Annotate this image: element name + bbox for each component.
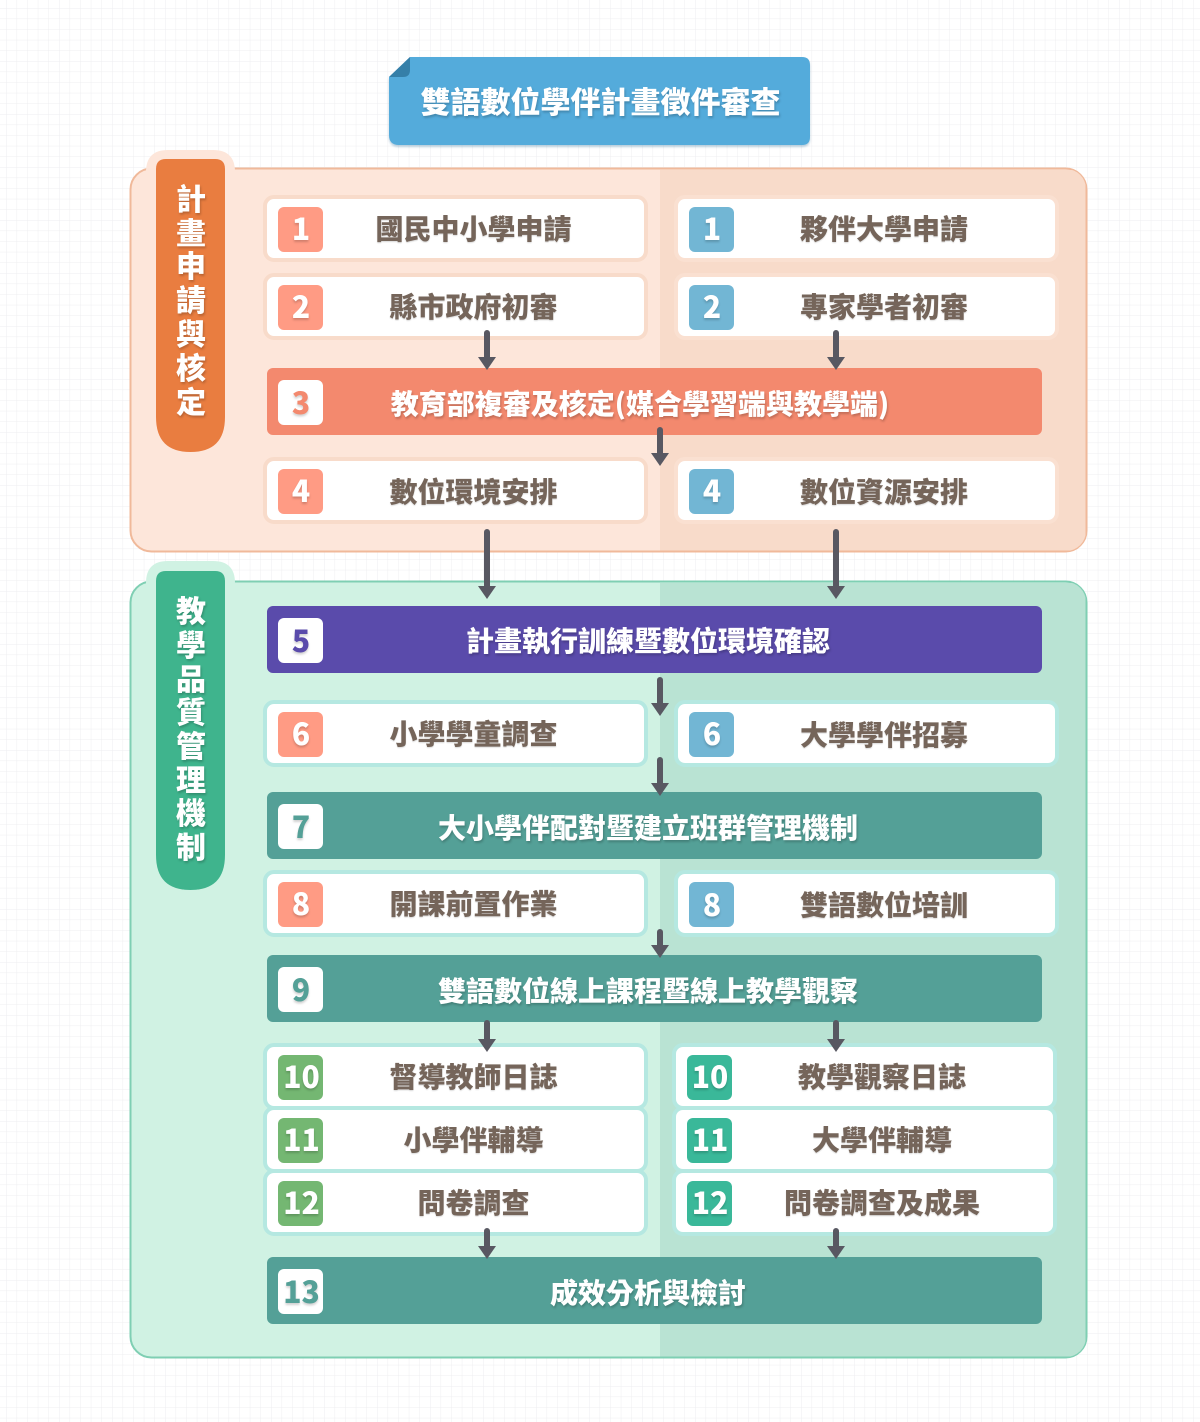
step 10 right: 教學觀察日誌: 教學觀察日誌 bbox=[798, 1056, 966, 1096]
step 12 right: 問卷調查及成果 bbox=[674, 1171, 1055, 1234]
step 4 left: 數位環境安排 bbox=[265, 459, 646, 522]
step 11 right: 大學伴輔導 bbox=[674, 1108, 1055, 1171]
step 2 left: 縣市政府初審: 2 bbox=[292, 283, 310, 327]
side tab: 教學品質管理機制: 管 bbox=[176, 722, 206, 766]
arrow: step 4 right to step 5 bbox=[827, 529, 845, 599]
step 7 bar: 大小學伴配對暨建立班群管理機制 bbox=[267, 792, 1042, 859]
step 6 right: 大學學伴招募: 大學學伴招募 bbox=[800, 714, 968, 754]
step 10 left: 督導教師日誌: 10 bbox=[283, 1053, 320, 1097]
step 6 left: 小學學童調查: 小學學童調查 bbox=[389, 713, 558, 753]
side tab: 教學品質管理機制: 理 bbox=[176, 756, 206, 800]
step 11 left: 小學伴輔導 bbox=[265, 1108, 646, 1171]
side tab: 教學品質管理機制: 教 bbox=[176, 587, 206, 631]
side tab: 教學品質管理機制: 學 bbox=[176, 621, 206, 665]
side tab: 教學品質管理機制: 制 bbox=[176, 823, 206, 867]
step 12 left: 問卷調查: 問卷調查 bbox=[417, 1182, 530, 1222]
step 5 bar: 計畫執行訓練暨數位環境確認 bbox=[267, 606, 1042, 673]
arrow: step 9 to step 10 left bbox=[478, 1020, 496, 1052]
step 7 bar: 大小學伴配對暨建立班群管理機制: 大小學伴配對暨建立班群管理機制 bbox=[438, 807, 858, 847]
step 2 right: 專家學者初審 bbox=[676, 275, 1057, 338]
side tab: 計畫申請與核定: 申 bbox=[176, 242, 206, 286]
step 2 left: 縣市政府初審: 縣市政府初審 bbox=[389, 286, 558, 326]
step 13 bar: 成效分析與檢討: 成效分析與檢討 bbox=[550, 1272, 746, 1312]
arrow: step 6 to step 7 bbox=[651, 757, 669, 796]
arrow: step 12 left to step 13 bbox=[478, 1228, 496, 1259]
arrow: step 2 left to step 3 bbox=[478, 330, 496, 370]
side tab: 計畫申請與核定: 畫 bbox=[176, 209, 206, 253]
step 13 bar: 成效分析與檢討: 13 bbox=[283, 1268, 320, 1312]
step 6 right: 大學學伴招募 bbox=[676, 702, 1057, 765]
arrow: step 8 to step 9 bbox=[651, 929, 669, 958]
side tab: 教學品質管理機制: 品 bbox=[176, 655, 206, 699]
step 1 right: 夥伴大學申請 bbox=[676, 197, 1057, 260]
side tab: 教學品質管理機制 bbox=[146, 561, 235, 890]
step 7 bar: 大小學伴配對暨建立班群管理機制: 7 bbox=[292, 803, 310, 847]
step 11 right: 大學伴輔導: 大學伴輔導 bbox=[812, 1119, 952, 1159]
step 8 right: 雙語數位培訓: 雙語數位培訓 bbox=[800, 884, 968, 924]
side tab: 教學品質管理機制: 質 bbox=[176, 688, 206, 732]
step 9 bar: 雙語數位線上課程暨線上教學觀察 bbox=[267, 955, 1042, 1022]
step 5 bar: 計畫執行訓練暨數位環境確認: 5 bbox=[292, 617, 310, 661]
step 1 left: 國民中小學申請 bbox=[265, 197, 646, 260]
step 8 left: 開課前置作業 bbox=[265, 872, 646, 935]
step 4 right: 數位資源安排 bbox=[676, 459, 1057, 522]
step 10 left: 督導教師日誌: 督導教師日誌 bbox=[389, 1056, 558, 1096]
step 2 right: 專家學者初審: 2 bbox=[703, 283, 721, 327]
side tab: 計畫申請與核定: 請 bbox=[176, 276, 206, 320]
step 6 right: 大學學伴招募: 6 bbox=[703, 710, 721, 754]
side tab: 計畫申請與核定: 與 bbox=[176, 310, 206, 354]
arrow: step 3 to step 4 bbox=[651, 427, 669, 466]
step 12 left: 問卷調查: 12 bbox=[283, 1179, 320, 1223]
step 11 left: 小學伴輔導: 11 bbox=[283, 1116, 320, 1160]
arrow: step 4 left to step 5 bbox=[478, 529, 496, 599]
side tab: 教學品質管理機制: 機 bbox=[176, 789, 206, 833]
step 1 right: 夥伴大學申請: 夥伴大學申請 bbox=[800, 208, 968, 248]
step 1 left: 國民中小學申請: 國民中小學申請 bbox=[375, 208, 572, 248]
arrow: step 12 right to step 13 bbox=[827, 1228, 845, 1259]
step 4 right: 數位資源安排: 4 bbox=[703, 467, 721, 511]
step 10 left: 督導教師日誌 bbox=[265, 1045, 646, 1108]
title banner: 雙語數位學伴計畫徵件審查 bbox=[420, 78, 780, 122]
step 13 bar: 成效分析與檢討 bbox=[267, 1257, 1042, 1324]
step 1 left: 國民中小學申請: 1 bbox=[292, 205, 310, 249]
step 12 left: 問卷調查 bbox=[265, 1171, 646, 1234]
step 10 right: 教學觀察日誌 bbox=[674, 1045, 1055, 1108]
step 3 bar: 教育部複審及核定: 3 bbox=[292, 379, 310, 423]
step 6 left: 小學學童調查 bbox=[265, 702, 646, 765]
step 8 right: 雙語數位培訓 bbox=[676, 872, 1057, 935]
arrow: step 9 to step 10 right bbox=[827, 1020, 845, 1052]
step 11 right: 大學伴輔導: 11 bbox=[692, 1116, 728, 1160]
step 1 right: 夥伴大學申請: 1 bbox=[703, 205, 721, 249]
step 2 left: 縣市政府初審 bbox=[265, 275, 646, 338]
arrow: step 2 right to step 3 bbox=[827, 330, 845, 370]
step 3 bar: 教育部複審及核定 bbox=[267, 368, 1042, 435]
step 4 left: 數位環境安排: 4 bbox=[292, 467, 310, 511]
panel: 計畫申請與核定 bbox=[130, 150, 1086, 552]
step 9 bar: 雙語數位線上課程暨線上教學觀察: 9 bbox=[292, 966, 310, 1010]
title banner bbox=[389, 57, 810, 145]
arrow: step 5 to step 6 bbox=[651, 677, 669, 716]
side tab: 計畫申請與核定 bbox=[146, 150, 235, 452]
step 10 right: 教學觀察日誌: 10 bbox=[692, 1053, 728, 1097]
step 11 left: 小學伴輔導: 小學伴輔導 bbox=[403, 1119, 544, 1159]
step 6 left: 小學學童調查: 6 bbox=[292, 710, 310, 754]
step 12 right: 問卷調查及成果: 問卷調查及成果 bbox=[784, 1182, 980, 1222]
side tab: 計畫申請與核定: 定 bbox=[176, 378, 206, 422]
side tab: 計畫申請與核定: 計 bbox=[176, 175, 206, 219]
side tab: 計畫申請與核定: 核 bbox=[176, 344, 206, 388]
step 4 left: 數位環境安排: 數位環境安排 bbox=[389, 471, 558, 511]
panel: 教學品質管理機制 bbox=[130, 561, 1086, 1358]
step 3 bar: 教育部複審及核定: 教育部複審及核定(媒合學習端與教學端) bbox=[391, 383, 889, 423]
step 5 bar: 計畫執行訓練暨數位環境確認: 計畫執行訓練暨數位環境確認 bbox=[466, 620, 830, 660]
step 8 left: 開課前置作業: 開課前置作業 bbox=[389, 883, 558, 923]
step 8 left: 開課前置作業: 8 bbox=[292, 880, 310, 924]
step 9 bar: 雙語數位線上課程暨線上教學觀察: 雙語數位線上課程暨線上教學觀察 bbox=[438, 970, 858, 1010]
step 4 right: 數位資源安排: 數位資源安排 bbox=[800, 471, 968, 511]
step 8 right: 雙語數位培訓: 8 bbox=[703, 881, 721, 925]
step 2 right: 專家學者初審: 專家學者初審 bbox=[800, 286, 968, 326]
step 12 right: 問卷調查及成果: 12 bbox=[692, 1179, 728, 1223]
